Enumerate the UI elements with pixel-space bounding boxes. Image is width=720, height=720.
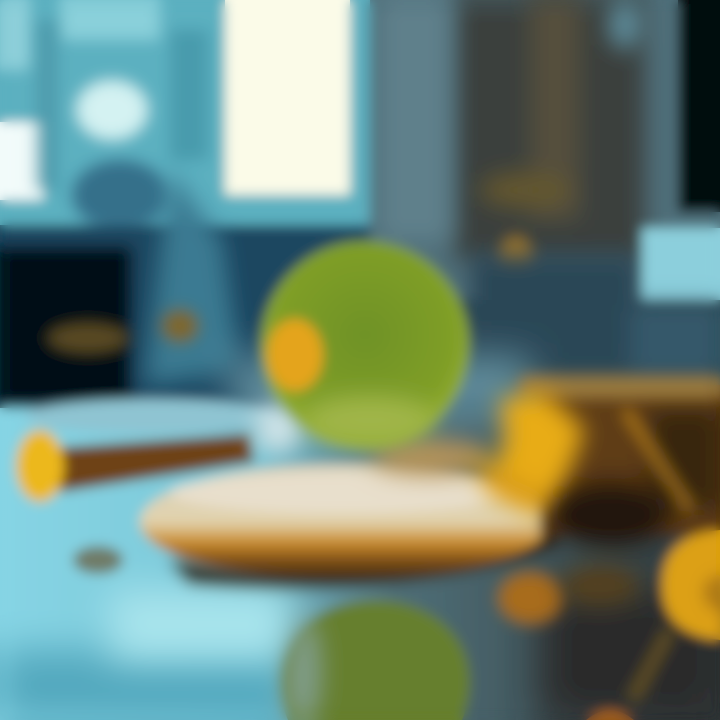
dark bottle on the right — [380, 0, 645, 365]
orange reflections — [498, 565, 670, 720]
main bread slice — [140, 440, 560, 586]
green fruit reflection — [280, 600, 470, 720]
table surface — [0, 355, 720, 720]
green fruit — [261, 241, 469, 449]
dark panel and pale block at far right — [609, 0, 720, 375]
dark counter band on the left — [0, 170, 370, 405]
small crumb — [73, 546, 123, 574]
left bread slice — [16, 399, 302, 502]
window highlights — [0, 0, 350, 230]
yellow fragment at right edge — [662, 530, 720, 640]
right bread stack — [470, 376, 720, 547]
